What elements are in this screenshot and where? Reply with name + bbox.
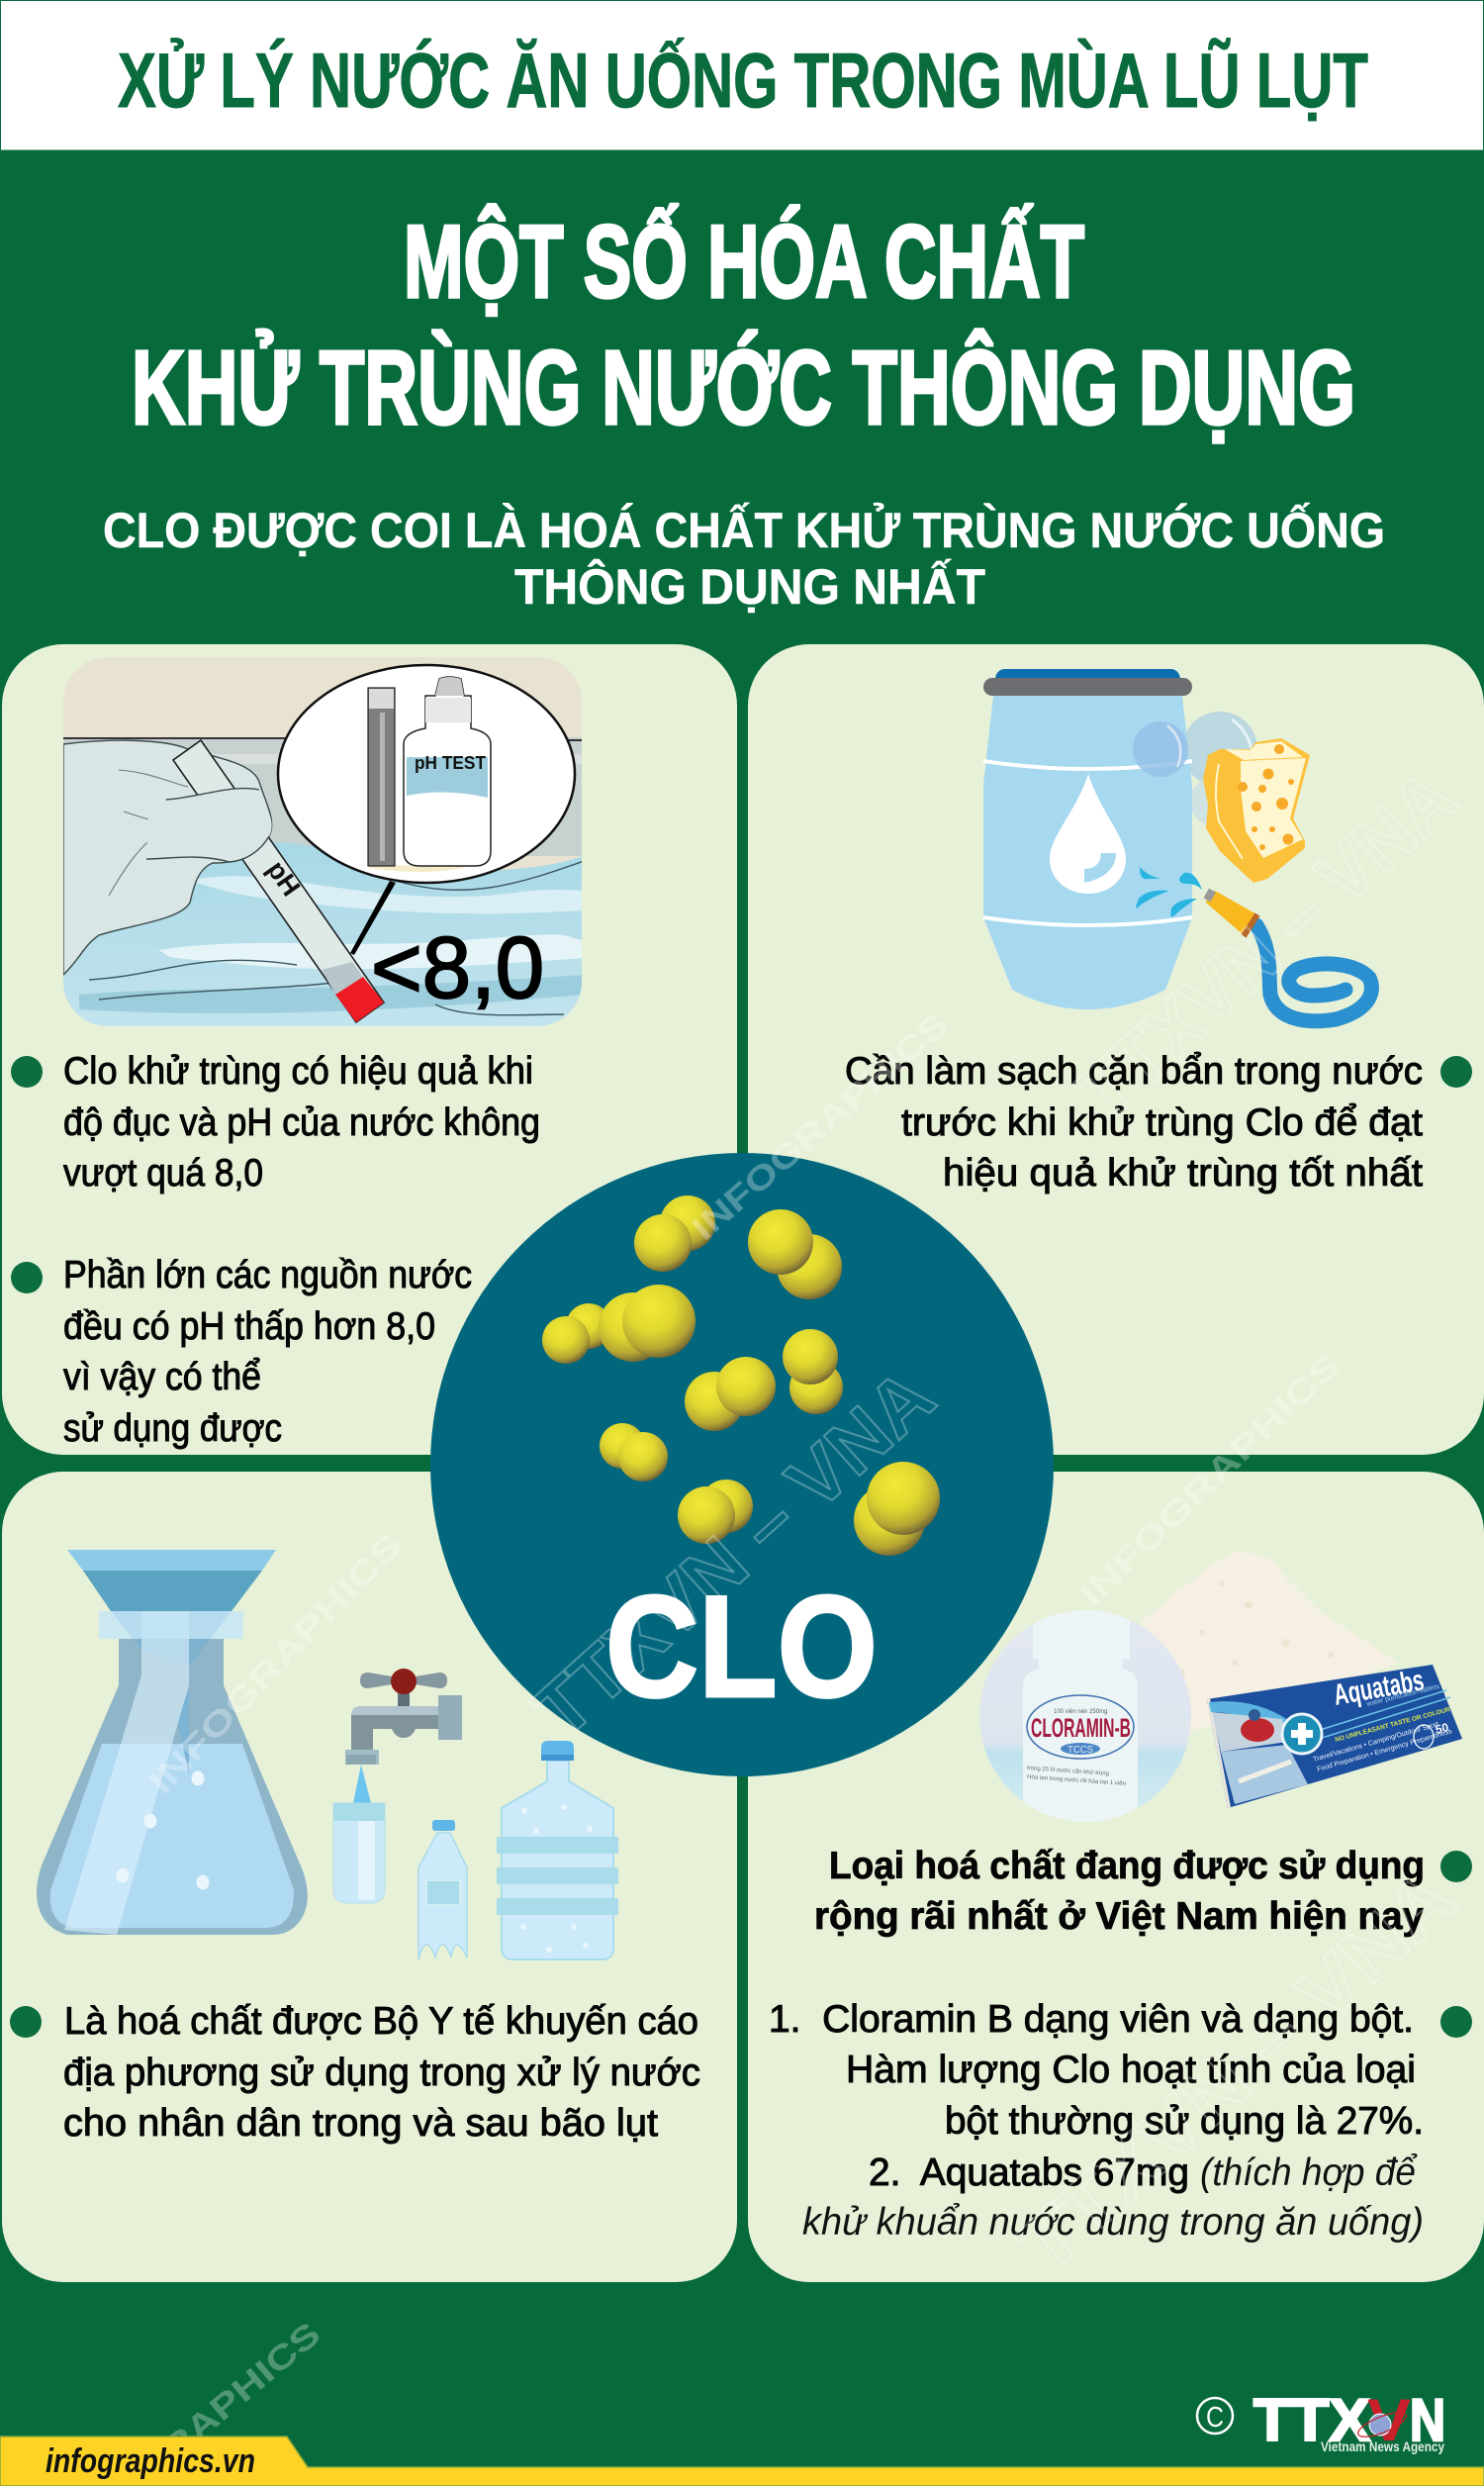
panel: cleaning xyxy=(748,644,1484,1455)
logo: TTXVN: Vietnam News Agency xyxy=(1321,2438,1444,2454)
text: cleaning: hiệu quả khử trùng tốt nhất xyxy=(943,1152,1423,1195)
header band xyxy=(0,0,1484,150)
text: water sources: Phần lớn các nguồn nước xyxy=(63,1254,472,1296)
panel: products xyxy=(748,1472,1484,2282)
bullet xyxy=(11,1262,43,1293)
text: product list: 1. Cloramin B dạng viên và dạng bột. xyxy=(769,1998,1414,2041)
text: Ministry recommendation xyxy=(63,2000,700,2145)
image: Cloramin-B bottle: 100 viên nén 250mg xyxy=(1054,1709,1107,1715)
panel: pH condition xyxy=(2,644,737,1455)
main heading: MỘT SỐ HÓA CHẤT xyxy=(404,205,1084,320)
image: Aquatabs box: NO UNPLEASANT TASTE OR COLOUR xyxy=(1335,1706,1451,1744)
image: Cloramin-B bottle: Hòa tan trong nước rồi hòa tan 1 viên xyxy=(1027,1774,1126,1787)
main heading xyxy=(132,205,1355,446)
illustration: large water jug xyxy=(497,1741,618,1960)
text: effectiveness: độ đục và pH của nước không xyxy=(63,1101,540,1144)
image: Aquatabs box: Aquatabs xyxy=(1331,1664,1427,1712)
text: cleaning: trước khi khử trùng Clo để đạt xyxy=(901,1101,1423,1144)
text: product list: (thích hợp để xyxy=(1200,2151,1418,2194)
text: effectiveness xyxy=(63,1050,540,1195)
magnifier line xyxy=(350,881,396,955)
heading: most used chemicals xyxy=(814,1845,1425,1938)
website label: infographics.vn xyxy=(46,2442,255,2480)
text: INFOGRAPHICS xyxy=(1072,1346,1347,1614)
text: Ministry recommendation: địa phương sử dụng trong xử lý nước xyxy=(63,2052,700,2094)
icon: water drop xyxy=(1050,774,1126,894)
hose xyxy=(1204,889,1371,1021)
bullet xyxy=(10,2006,42,2038)
bullet xyxy=(11,1056,43,1088)
text: water sources xyxy=(63,1254,472,1450)
text: product list: 2. Aquatabs 67mg xyxy=(869,2151,1189,2194)
text: product list: bột thường sử dụng là 27%. xyxy=(945,2100,1424,2143)
copyright mark xyxy=(1197,2398,1233,2434)
illustration: small bottle xyxy=(418,1820,467,1960)
logo: TTXVN: V xyxy=(1367,2387,1411,2453)
pH value: <8,0 xyxy=(371,918,544,1016)
text: Ministry recommendation: cho nhân dân trong và sau bão lụt xyxy=(63,2102,658,2145)
text: INFOGRAPHICS xyxy=(141,1526,410,1802)
text: effectiveness: vượt quá 8,0 xyxy=(63,1152,263,1195)
text: product list xyxy=(769,1998,1424,2244)
magnifier circle xyxy=(278,665,575,883)
image: Cloramin-B bottle: CLORAMIN-B xyxy=(1031,1713,1131,1743)
pH TEST bottle: pH TEST xyxy=(415,753,486,773)
illustration: faucet and glass xyxy=(333,1669,462,1903)
image: powder pile xyxy=(1141,1552,1398,1732)
subheading: THÔNG DỤNG NHẤT xyxy=(514,558,985,615)
image: Aquatabs box: water purification tablets xyxy=(1365,1683,1440,1708)
bubbles xyxy=(1182,712,1257,826)
logo: TTXVN: N xyxy=(1410,2387,1445,2453)
strip label: pH xyxy=(261,855,306,902)
text: Ministry recommendation: Là hoá chất được Bộ Y tế khuyến cáo xyxy=(64,2000,698,2043)
image: Aquatabs box: 50 xyxy=(1434,1720,1450,1737)
text: water sources: sử dụng được xyxy=(63,1407,282,1450)
text: effectiveness: Clo khử trùng có hiệu quả khi xyxy=(63,1050,533,1093)
subheading: CLO ĐƯỢC COI LÀ HOÁ CHẤT KHỬ TRÙNG NƯỚC UỐNG xyxy=(103,502,1385,558)
test tube xyxy=(368,688,395,866)
logo: TTXVN xyxy=(1197,2387,1445,2454)
subheading xyxy=(103,502,1385,615)
text: product list: khử khuẩn nước dùng trong ăn uống) xyxy=(802,2201,1424,2244)
text: GRAPHICS xyxy=(130,2315,327,2486)
cross badge xyxy=(1282,1714,1322,1754)
image: Aquatabs box: Travel/Vacations • Camping/Outdoor Sport xyxy=(1313,1721,1439,1764)
water splashes xyxy=(1136,867,1202,916)
text: TTXVN – VNA xyxy=(1001,1854,1472,2289)
image: Aquatabs box xyxy=(1207,1664,1462,1808)
image: Cloramin-B bottle xyxy=(979,1610,1191,1826)
image: Aquatabs box: Food Preparation • Emergency Preparedness xyxy=(1317,1728,1453,1773)
text: product list: Hàm lượng Clo hoạt tính của loại xyxy=(846,2049,1416,2091)
TCCS badge: TCCS xyxy=(1067,1745,1093,1756)
panel: recommendation xyxy=(2,1472,737,2282)
text: cleaning xyxy=(845,1050,1423,1195)
copyright mark: C xyxy=(1206,2402,1224,2434)
heading: most used chemicals: Loại hoá chất đang được sử dụng xyxy=(829,1845,1425,1887)
heading: most used chemicals: rộng rãi nhất ở Việt Nam hiện nay xyxy=(814,1895,1424,1938)
text: TTXVN – VNA xyxy=(516,1352,950,1755)
sponge xyxy=(1203,738,1310,883)
chlorine molecules xyxy=(542,1195,940,1556)
bullet xyxy=(1440,1851,1472,1882)
pH TEST bottle xyxy=(404,677,491,866)
TCCS badge xyxy=(1061,1743,1100,1756)
text: cleaning: Cần làm sạch cặn bẩn trong nước xyxy=(845,1050,1423,1093)
text: INFOGRAPHICS xyxy=(685,1005,956,1248)
logo: TTXVN: TTX xyxy=(1253,2387,1370,2453)
bullet xyxy=(1440,1056,1472,1088)
bullet xyxy=(1440,2006,1472,2038)
text: TTXVN – VNA xyxy=(1061,753,1472,1136)
illustration: pH test xyxy=(63,657,584,1029)
illustration: water barrel xyxy=(983,669,1371,1021)
illustration: flask and funnel xyxy=(37,1550,308,1935)
image: Cloramin-B bottle: trong 25 lít nước cần khử trùng xyxy=(1027,1765,1109,1777)
footer yellow band xyxy=(0,2437,1484,2486)
text: water sources: vì vậy có thể xyxy=(63,1356,261,1398)
CLO label: CLO xyxy=(605,1566,878,1727)
central circle: CLO xyxy=(430,1153,1054,1776)
text: water sources: đều có pH thấp hơn 8,0 xyxy=(63,1305,435,1348)
